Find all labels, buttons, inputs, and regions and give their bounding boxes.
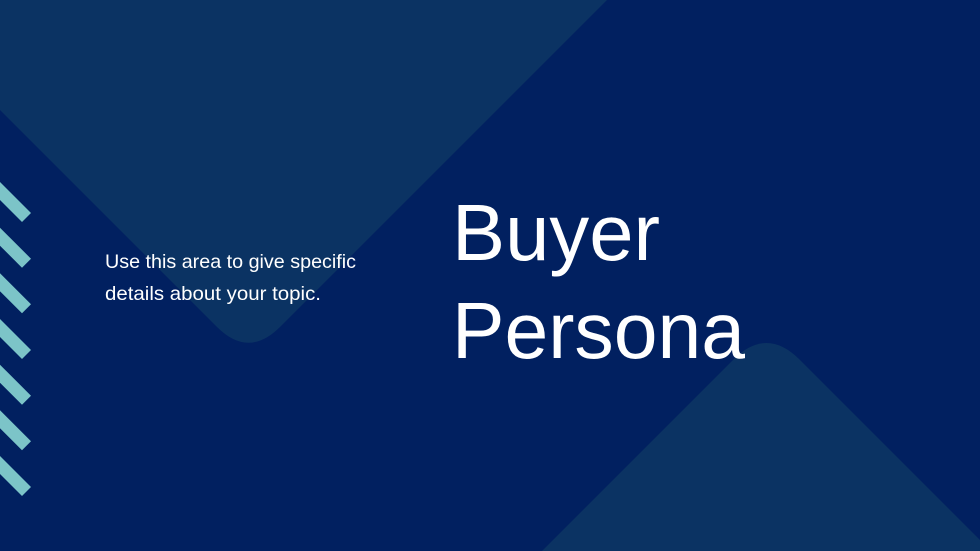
title <box>452 188 745 375</box>
decorative shape: top-left rounded triangle <box>0 0 607 343</box>
title: Buyer <box>452 188 660 277</box>
description text <box>105 251 356 305</box>
description text: details about your topic. <box>105 283 321 305</box>
description text: Use this area to give specific <box>105 251 356 273</box>
title: Persona <box>452 286 745 375</box>
decorative shape: bottom-right rounded triangle <box>542 343 980 551</box>
teal diagonal stripes <box>0 182 31 496</box>
